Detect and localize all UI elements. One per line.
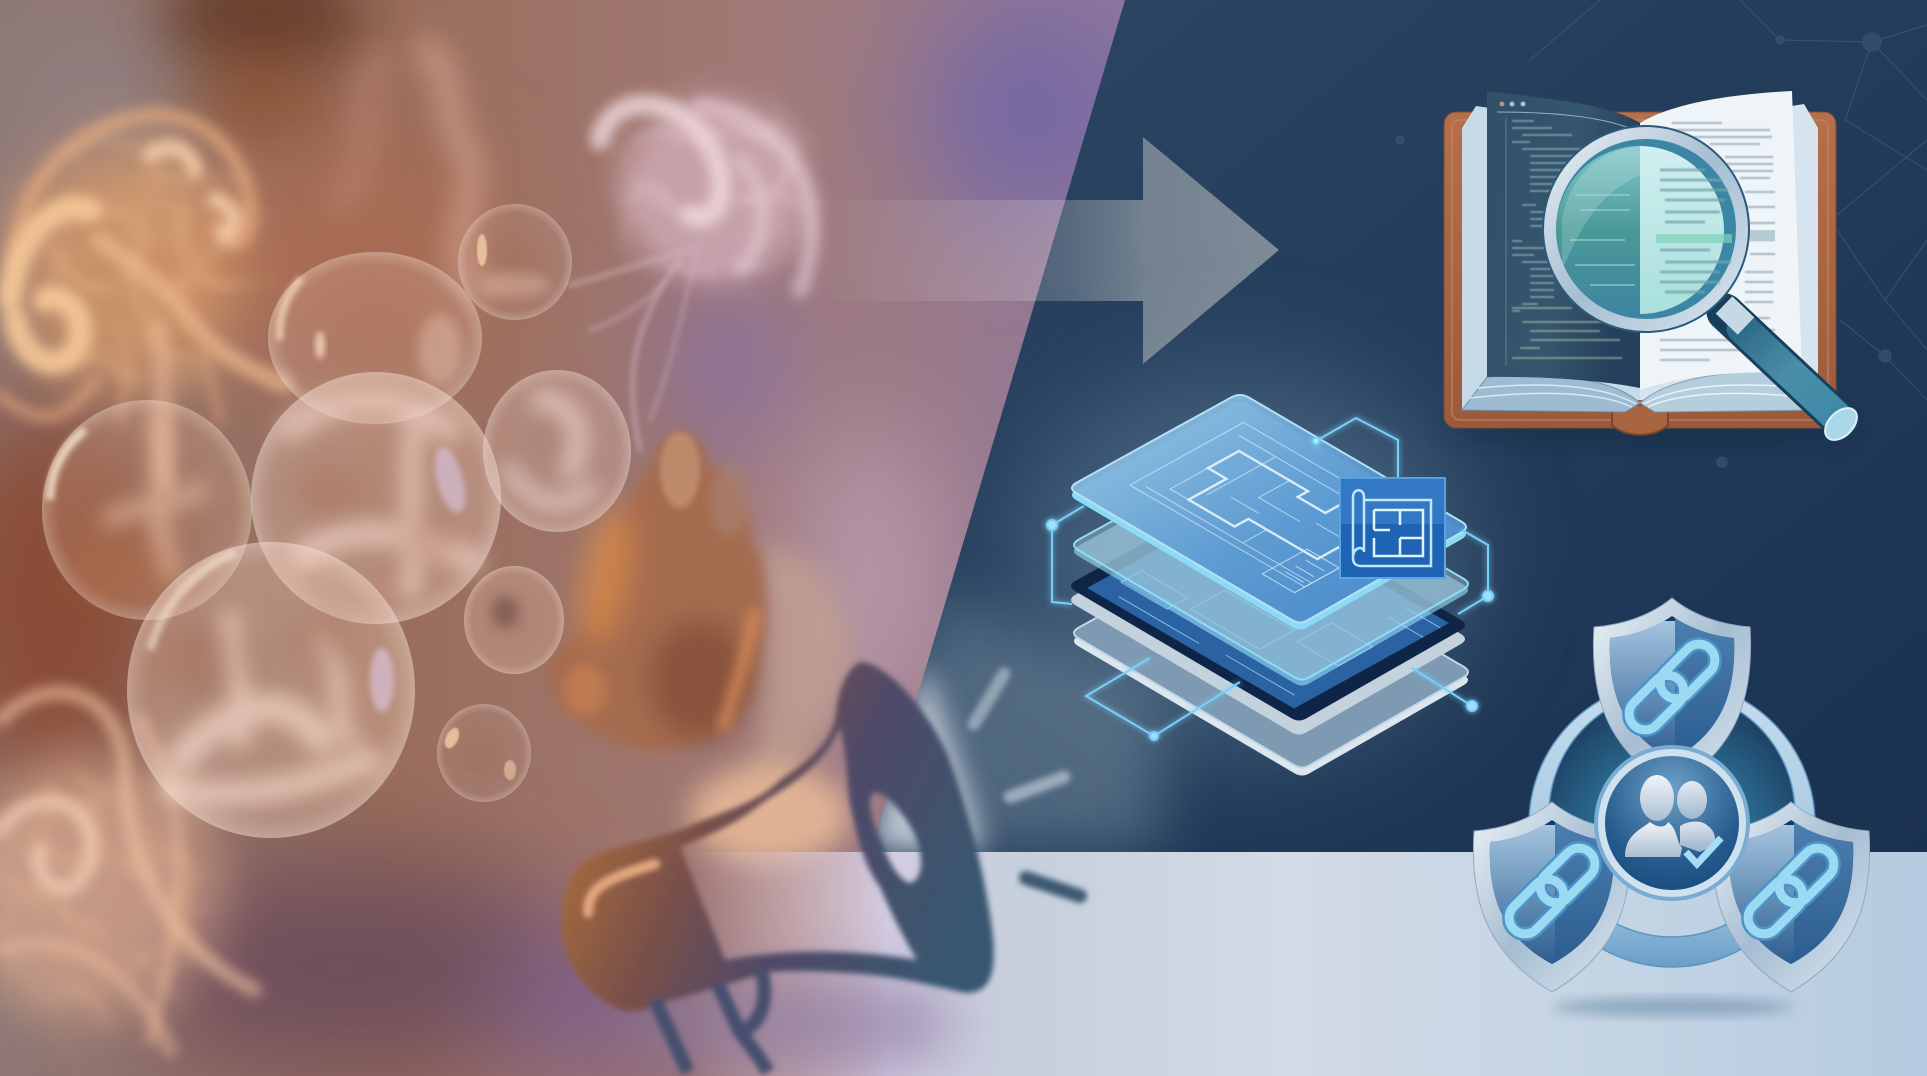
code page <box>1487 91 1640 388</box>
background network lines <box>1396 0 1927 467</box>
arrow pointing right <box>810 137 1279 364</box>
connecting ring <box>1529 681 1815 967</box>
shield: top <box>1593 598 1751 788</box>
icon: stacked blueprint layers <box>1047 395 1493 776</box>
text lines <box>1660 123 1775 360</box>
blueprint badge <box>1340 478 1445 578</box>
megaphone horn and body <box>562 662 994 1011</box>
panel: light floor <box>640 852 1927 1076</box>
connection lines <box>1047 418 1493 740</box>
blurred head <box>162 0 362 76</box>
peach glow inside the megaphone <box>690 765 850 865</box>
shield: lower left <box>1473 802 1631 992</box>
blurred hand <box>547 432 850 800</box>
shield: lower right <box>1712 802 1870 992</box>
floor plan lines <box>1120 422 1418 593</box>
bubble: bottom small <box>437 704 531 802</box>
bubble: center large <box>251 372 501 624</box>
layer 4 <box>1074 540 1468 776</box>
smoke: upper center <box>340 50 480 290</box>
layer 2 <box>1074 452 1468 686</box>
smoke: lower left <box>0 693 255 1050</box>
text page <box>1640 91 1802 390</box>
icon: open book with magnifier <box>1444 91 1863 446</box>
bubble: right medium <box>483 370 631 532</box>
check mark <box>1686 838 1721 864</box>
spine clasp <box>1612 404 1668 435</box>
megaphone highlight <box>588 864 655 913</box>
magnifier rim <box>1543 126 1749 332</box>
magnifier lens <box>1556 146 1640 314</box>
megaphone icon <box>562 662 994 1072</box>
bubbles <box>42 204 631 838</box>
page stacks <box>1462 106 1640 410</box>
layer 1 <box>1072 395 1466 630</box>
smoke: pink swirl upper right <box>570 95 812 450</box>
bubble: left large <box>42 400 252 620</box>
bubble: upper large <box>268 252 482 424</box>
code lines <box>1512 121 1602 311</box>
window dots <box>1500 102 1526 106</box>
smoke: orange swirl upper left <box>0 115 285 480</box>
sound lines <box>974 674 1080 896</box>
bubble: near hand <box>464 566 564 674</box>
central users badge <box>1594 745 1750 901</box>
layer 3: tablet <box>1071 493 1465 734</box>
user icons <box>1625 775 1715 857</box>
bubble: lower large <box>127 542 415 838</box>
icon: three shields around verified users <box>1473 598 1870 1016</box>
floor shadow <box>1553 998 1793 1016</box>
ring interior <box>1550 713 1794 824</box>
book cover <box>1444 112 1836 428</box>
bubble: upper small <box>458 204 572 320</box>
magnifier handle <box>1725 312 1840 420</box>
panel: dark navy right side <box>870 0 1927 852</box>
megaphone handle <box>655 972 768 1072</box>
